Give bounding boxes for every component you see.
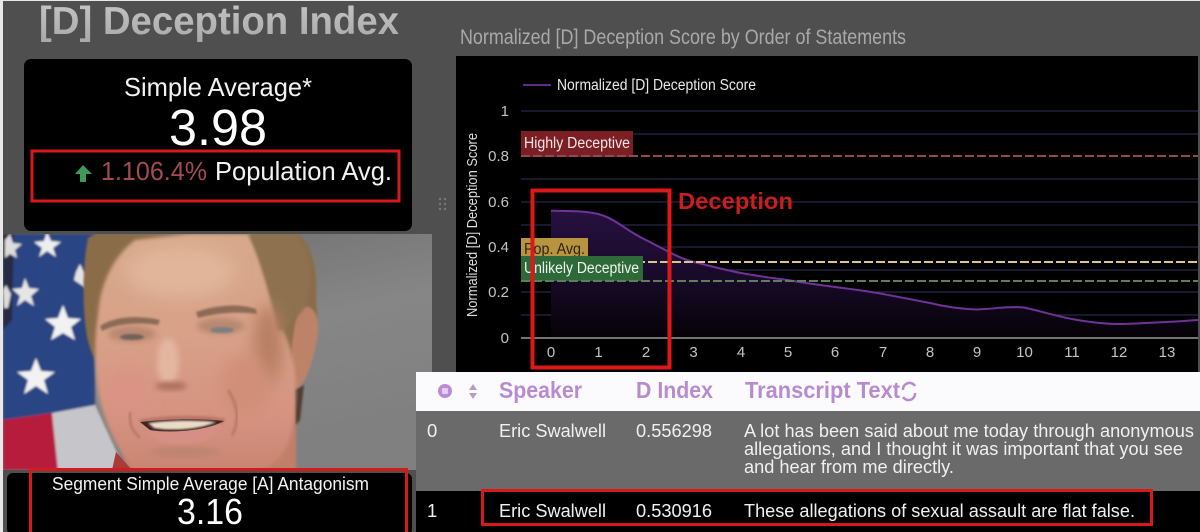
threshold: unlikely deceptive bbox=[521, 256, 1198, 281]
table header: Speaker bbox=[499, 377, 582, 403]
title: [D] Deception Index bbox=[39, 0, 399, 43]
upper lip bbox=[138, 416, 226, 425]
flag bbox=[3, 232, 125, 470]
simple average label: Simple Average* bbox=[124, 72, 312, 102]
y axis labels: 0.4 bbox=[488, 239, 509, 256]
forehead highlight bbox=[125, 246, 235, 298]
x axis labels: 1 bbox=[594, 344, 603, 361]
right cheek bbox=[226, 358, 267, 403]
antagonism label: Segment Simple Average [A] Antagonism bbox=[52, 474, 369, 494]
y axis labels: 0.8 bbox=[488, 148, 509, 165]
table header: D Index bbox=[636, 377, 713, 403]
red highlight box: false statement bbox=[482, 490, 1152, 524]
x axis labels bbox=[547, 344, 1175, 361]
table row 0: Eric Swalwell bbox=[499, 420, 606, 441]
left brow bbox=[100, 317, 160, 331]
table header bbox=[416, 372, 1200, 411]
left eye bbox=[120, 334, 144, 340]
table row 0 bbox=[416, 411, 1200, 491]
icon: sort arrows bbox=[469, 384, 477, 399]
icon: drag handle bbox=[439, 198, 446, 210]
teeth bbox=[148, 421, 216, 430]
table row 0: 0.556298 bbox=[636, 420, 712, 441]
nose bbox=[157, 338, 179, 386]
threshold: unlikely deceptive: Unlikely Deceptive bbox=[524, 260, 639, 277]
y axis labels: 1 bbox=[501, 103, 509, 120]
x axis labels: 8 bbox=[926, 344, 934, 361]
portrait photo bbox=[3, 232, 432, 470]
y axis labels: 0 bbox=[501, 330, 509, 347]
x axis labels: 2 bbox=[642, 344, 650, 361]
x axis line bbox=[521, 337, 1198, 339]
chin shadow bbox=[149, 447, 221, 457]
population percentage: 1.106.4% bbox=[101, 156, 207, 186]
y axis title: Normalized [D] Deception Score bbox=[464, 133, 481, 317]
x axis labels: 0 bbox=[547, 344, 555, 361]
mouth interior bbox=[140, 419, 224, 431]
table header: Transcript Text bbox=[745, 377, 900, 403]
threshold: highly deceptive: Highly Deceptive bbox=[524, 135, 630, 152]
x axis labels: 5 bbox=[784, 344, 792, 361]
x axis labels: 13 bbox=[1159, 344, 1175, 361]
table row 0: allegations, and I thought it was important that you see bbox=[744, 438, 1183, 459]
icon: header badge bbox=[438, 384, 452, 398]
hair right bbox=[248, 234, 310, 332]
y axis labels bbox=[488, 103, 509, 347]
eye socket shadows bbox=[108, 326, 156, 342]
dark hair behind jaw bbox=[294, 385, 304, 425]
table row 0: A lot has been said about me today through anonymous bbox=[744, 420, 1194, 441]
neck bbox=[118, 400, 296, 470]
y axis labels: 0.2 bbox=[488, 284, 509, 301]
left cheek bbox=[108, 368, 148, 416]
x axis labels: 6 bbox=[831, 344, 839, 361]
chart legend: Normalized [D] Deception Score bbox=[557, 77, 756, 94]
table row 1: These allegations of sexual assault are flat false. bbox=[744, 500, 1135, 521]
threshold: highly deceptive bbox=[521, 131, 1198, 157]
red highlight box: deception bbox=[532, 190, 670, 368]
panel: segment antagonism card bbox=[7, 470, 412, 532]
table row 1: Eric Swalwell bbox=[499, 500, 606, 521]
x axis labels: 9 bbox=[973, 344, 981, 361]
threshold: population average bbox=[521, 238, 1198, 263]
table row 1: 0.530916 bbox=[636, 500, 712, 521]
table row 0: 0 bbox=[427, 420, 437, 441]
simple average value: 3.98 bbox=[169, 99, 267, 156]
temple shadow bbox=[254, 305, 282, 385]
icon: green up arrow bbox=[75, 165, 92, 182]
transcript table bbox=[416, 372, 1200, 532]
x axis labels: 11 bbox=[1064, 344, 1080, 361]
right brow bbox=[196, 305, 257, 318]
score area and line bbox=[551, 211, 1198, 338]
threshold: population average: Pop. Avg. bbox=[524, 241, 585, 258]
ear bbox=[291, 306, 318, 388]
smile folds bbox=[130, 412, 140, 438]
y axis labels: 0.6 bbox=[488, 194, 509, 211]
x axis labels: 4 bbox=[737, 344, 745, 361]
face bbox=[84, 234, 318, 470]
red highlight box: antagonism bbox=[30, 470, 406, 532]
table row 1: 1 bbox=[427, 500, 437, 521]
table row 1 bbox=[416, 491, 1200, 532]
x axis labels: 10 bbox=[1016, 344, 1033, 361]
x axis labels: 7 bbox=[879, 344, 887, 361]
antagonism value: 3.16 bbox=[177, 491, 243, 532]
chart heading: Normalized [D] Deception Score by Order of Statements bbox=[460, 26, 906, 49]
icon: refresh bbox=[903, 383, 915, 400]
x axis labels: 3 bbox=[689, 344, 698, 361]
head bbox=[95, 234, 296, 470]
table row 0: and hear from me directly. bbox=[744, 456, 954, 477]
line chart panel bbox=[456, 56, 1198, 372]
red highlight box: population comparison bbox=[32, 151, 399, 201]
lower lip bbox=[148, 423, 222, 445]
x axis labels: 12 bbox=[1111, 344, 1127, 361]
population label: Population Avg. bbox=[215, 156, 392, 186]
hair bbox=[82, 234, 318, 360]
right eye bbox=[210, 327, 234, 333]
panel: simple average card bbox=[24, 59, 412, 231]
deception callout: Deception bbox=[678, 188, 793, 214]
